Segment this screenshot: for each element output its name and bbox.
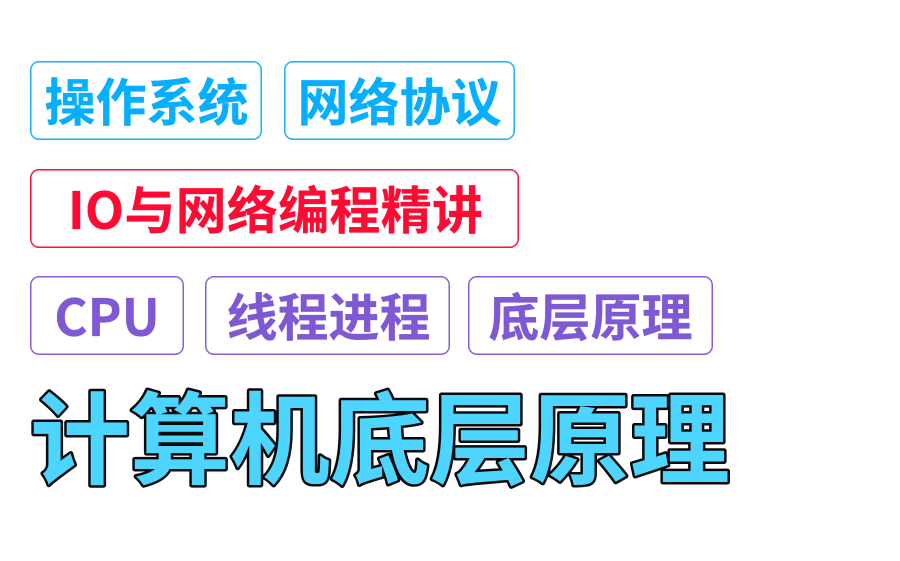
title: 计算机底层原理: [30, 360, 730, 505]
tag: 线程进程: 线程进程: [226, 277, 430, 351]
tag: 操作系统: 操作系统: [44, 62, 248, 136]
tag: CPU: CPU: [54, 277, 160, 351]
tag: 网络协议: 网络协议: [297, 62, 502, 136]
tag: CPU: [30, 276, 184, 355]
tag: 底层原理: 底层原理: [488, 277, 692, 351]
tag: IO与网络编程精讲: IO与网络编程精讲: [68, 170, 483, 244]
